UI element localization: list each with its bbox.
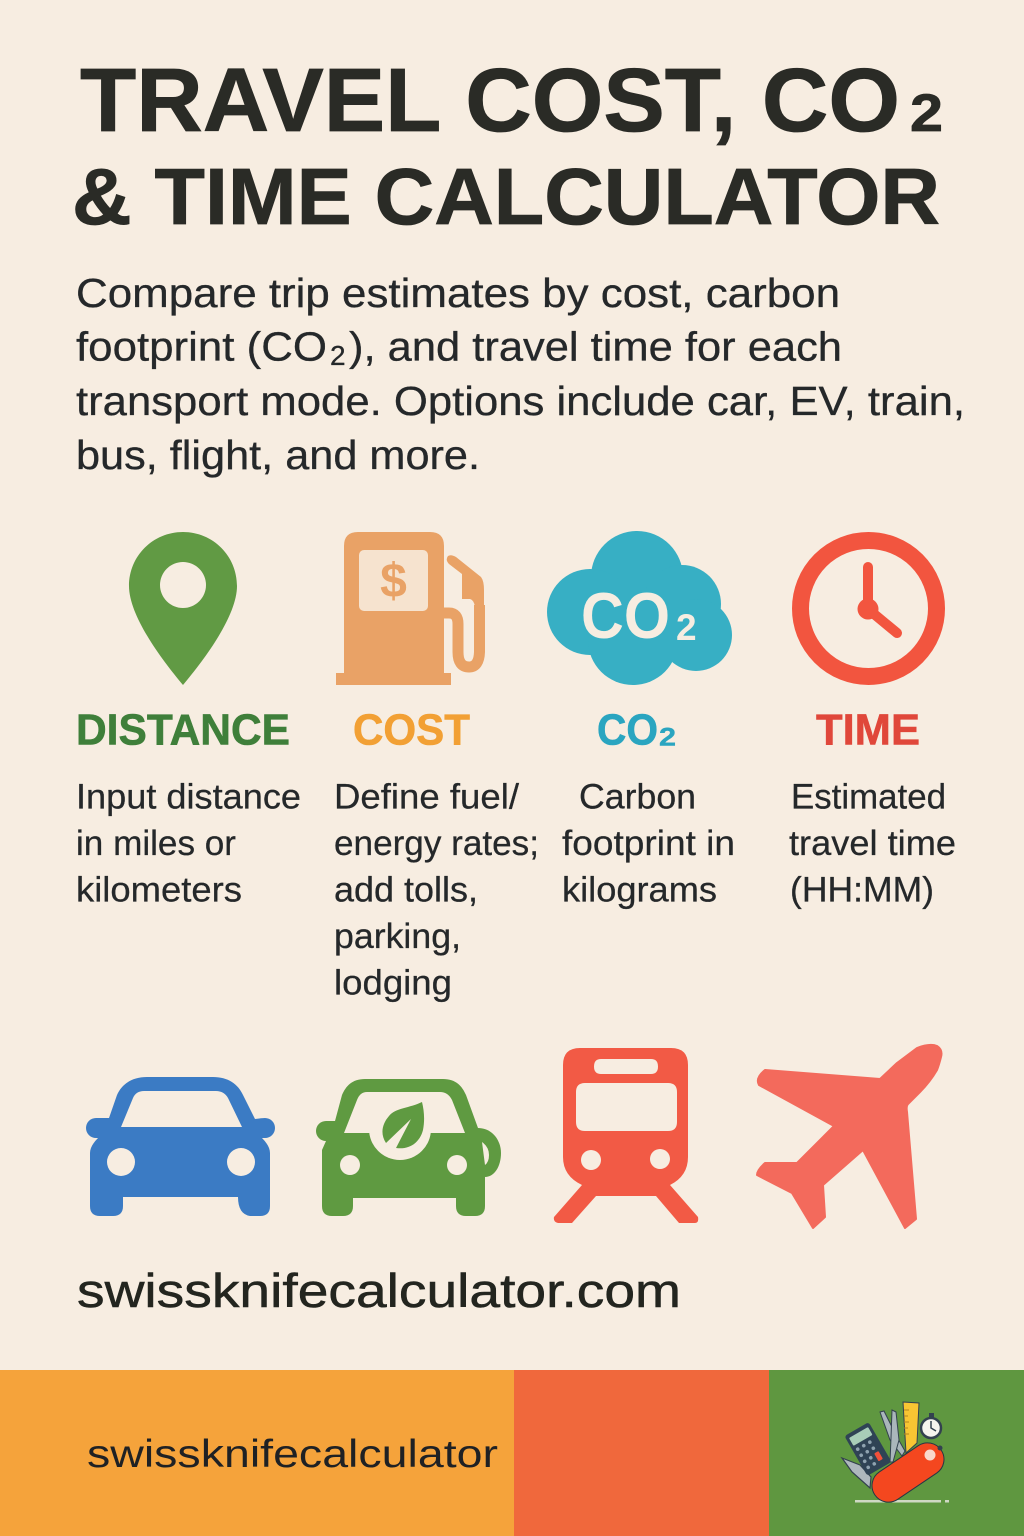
description: CO2: kilograms [562, 870, 717, 910]
icon: fuel pump [336, 532, 484, 685]
description: cost: Define fuel/ [334, 778, 519, 816]
footer band [0, 1370, 1024, 1536]
description: distance: in miles or [76, 824, 236, 863]
icon: green electric car [316, 1079, 501, 1216]
intro text: 2 [330, 340, 346, 371]
icon: CO2 cloud [547, 531, 732, 685]
footer brand text: swissknifecalculator [87, 1433, 498, 1476]
description: cost: parking, [334, 917, 461, 956]
title: TRAVEL COST, CO [80, 51, 900, 151]
intro text: Compare trip estimates by cost, carbon [76, 270, 840, 316]
description: time: travel time [789, 824, 956, 863]
icon: airplane [757, 1045, 942, 1228]
intro text: ), and travel time for each [349, 324, 842, 370]
icon: swiss knife logo [842, 1402, 950, 1509]
icon: CO2 cloud: CO [581, 579, 670, 652]
title [72, 51, 943, 241]
title: 2 [910, 84, 943, 143]
title: & TIME CALCULATOR [72, 152, 940, 241]
description: CO2: Carbon [579, 778, 696, 816]
description: time: (HH:MM) [790, 870, 934, 910]
description: CO2 [562, 778, 735, 910]
intro text: transport mode. Options include car, EV, train, [76, 378, 965, 424]
label: cost: COST [353, 706, 470, 754]
description: distance [76, 778, 301, 910]
icon: fuel pump: $ [380, 555, 407, 608]
label: CO2: CO [597, 706, 658, 754]
description: CO2: footprint in [562, 824, 735, 863]
intro text: bus, flight, and more. [76, 432, 480, 478]
description: time [789, 778, 956, 910]
intro text [76, 270, 965, 478]
icon: train [554, 1048, 698, 1223]
icon: blue car [86, 1077, 275, 1216]
label: time: TIME [816, 706, 920, 754]
description: cost [334, 778, 539, 1002]
description: time: Estimated [791, 778, 946, 816]
description: cost: energy rates; [334, 824, 539, 863]
intro text: footprint (CO [76, 324, 327, 370]
description: cost: add tolls, [334, 870, 478, 910]
icon: distance pin [129, 532, 237, 685]
label: CO2: 2 [659, 724, 676, 752]
icon: clock [800, 540, 936, 676]
icon: CO2 cloud: 2 [676, 607, 697, 648]
description: distance: kilometers [76, 870, 242, 910]
description: distance: Input distance [76, 778, 301, 816]
label: distance: DISTANCE [76, 706, 290, 754]
description: cost: lodging [334, 964, 452, 1002]
website url: swissknifecalculator.com [77, 1264, 681, 1317]
